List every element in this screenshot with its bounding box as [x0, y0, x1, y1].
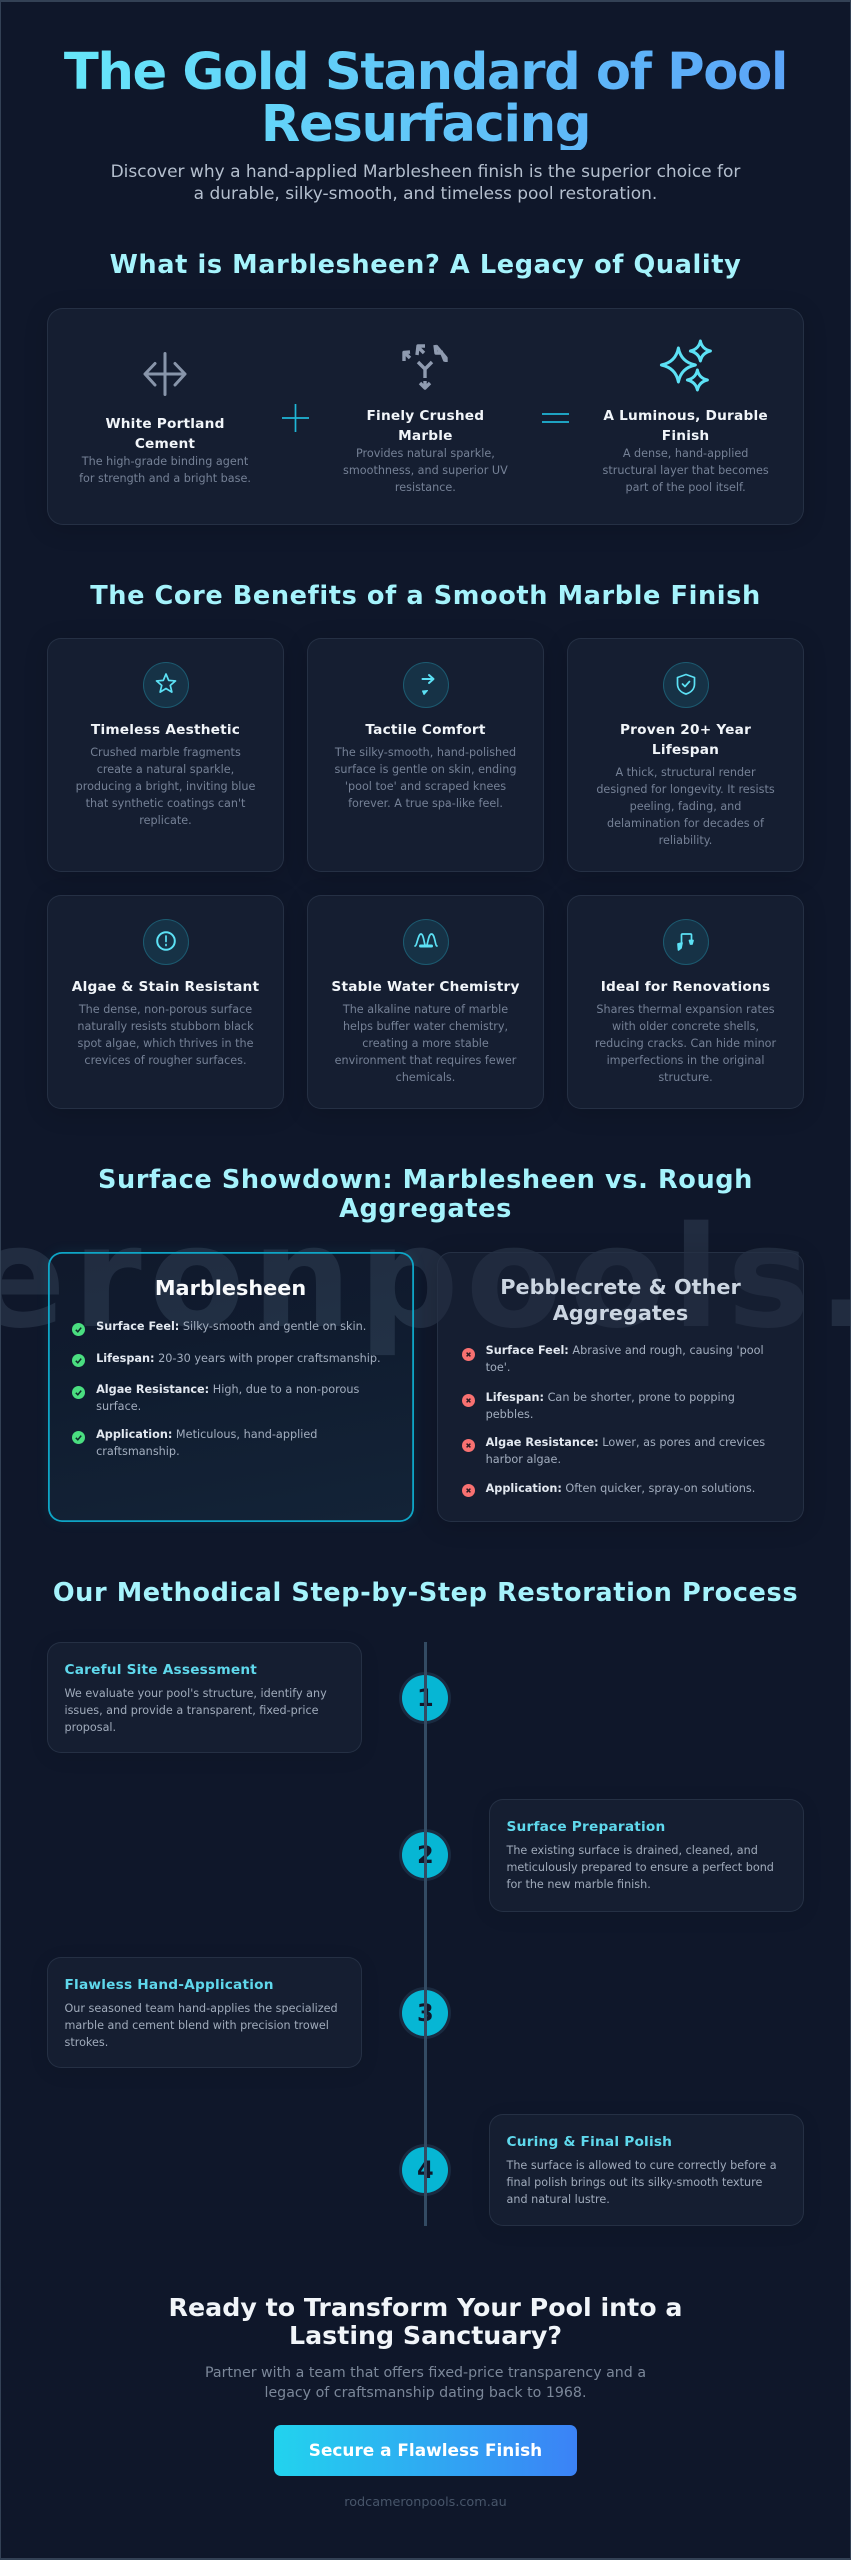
ingredient description: resistance.: [395, 480, 456, 494]
card title: Tactile Comfort: [365, 722, 486, 738]
panel: marblesheen formula: [47, 308, 804, 525]
panel: pebblecrete comparison: [437, 1252, 804, 1522]
website: rodcameronpools.com.au: [344, 2495, 507, 2510]
step number 2: [402, 1832, 448, 1878]
card text: with older concrete shells,: [612, 1020, 759, 1032]
step text: [506, 2157, 777, 2208]
card text: The silky-smooth, hand-polished: [335, 746, 516, 758]
card text: Shares thermal expansion rates: [596, 1002, 775, 1016]
card title: Timeless Aesthetic: [91, 722, 240, 738]
card text: The dense, non-porous surface: [79, 1002, 252, 1016]
step number 1: 1: [417, 1684, 434, 1712]
step title: Careful Site Assessment: [64, 1662, 257, 1678]
card text: that synthetic coatings can't: [86, 796, 245, 810]
icon: star: [142, 662, 188, 708]
card text: The alkaline nature of marble: [343, 1002, 508, 1016]
subtitle: a durable, silky-smooth, and timeless pool restoration.: [194, 184, 657, 204]
card text: create a natural sparkle,: [97, 762, 234, 776]
check item: application: [96, 1428, 317, 1458]
card text: A thick, structural render: [615, 766, 756, 778]
panel: timeless aesthetic: [47, 638, 284, 872]
cross item: lifespan: pebbles.: [486, 1408, 533, 1420]
icon: shield: [662, 662, 708, 708]
card text: chemicals.: [396, 1070, 455, 1084]
card title: Stable Water Chemistry: [331, 979, 520, 995]
heading: restoration process: Our Methodical Step-by-Step Restoration Process: [53, 1578, 798, 1608]
step text: We evaluate your pool's structure, identify any: [64, 1687, 327, 1700]
step title: Curing & Final Polish: [506, 2134, 672, 2150]
cross item: lifespan: Lifespan: Can be shorter, prone to popping: [486, 1390, 735, 1404]
step text: [64, 1685, 327, 1736]
step number 2: 2: [417, 1841, 434, 1869]
heading: surface showdown: Surface Showdown: Marblesheen vs. Rough: [98, 1165, 753, 1195]
call to action: [100, 2290, 751, 2520]
card title: Ideal for Renovations: [601, 979, 770, 995]
card text: naturally resists stubborn black: [77, 1020, 254, 1032]
result description: A dense, hand-applied: [623, 446, 748, 460]
ingredient title: Cement: [135, 436, 195, 452]
comparison title: [500, 1275, 741, 1325]
step text: [506, 1842, 774, 1893]
cta text: [205, 2363, 646, 2403]
cross item: algae resistance: Algae Resistance: Lower, as pores and crevices: [486, 1436, 765, 1448]
ingredient: white portland cement: [79, 352, 251, 485]
icon: sparkles: [660, 340, 712, 392]
icon: crushed fragments: [402, 344, 448, 390]
equals sign: [542, 413, 569, 423]
cta button: [274, 2425, 577, 2476]
cta text: Partner with a team that offers fixed-price transparency and a: [205, 2365, 646, 2381]
step text: Our seasoned team hand-applies the specialized: [64, 2002, 338, 2015]
card text: imperfections in the original: [607, 1054, 764, 1066]
subtitle: Discover why a hand-applied Marblesheen finish is the superior choice for: [111, 162, 740, 182]
card text: [596, 766, 775, 846]
icon: cement arrows: [144, 352, 186, 396]
card text: [335, 1002, 516, 1084]
ingredient title: Finely Crushed: [367, 408, 484, 424]
cross item: surface feel: toe'.: [486, 1360, 510, 1374]
check item: lifespan: Lifespan: 20-30 years with proper craftsmanship.: [96, 1352, 381, 1364]
step number 3: 3: [417, 1999, 434, 2027]
cross item: surface feel: [486, 1344, 764, 1374]
result title: [603, 408, 768, 444]
step text: proposal.: [64, 1721, 116, 1734]
cta heading: [169, 2294, 682, 2351]
result description: part of the pool itself.: [625, 480, 746, 494]
check item: application: Application: Meticulous, hand-applied: [96, 1428, 317, 1440]
step text: meticulously prepared to ensure a perfect bond: [506, 1861, 774, 1874]
icon: cross: [462, 1348, 475, 1361]
step number 4: 4: [417, 2156, 434, 2184]
card text: designed for longevity. It resists: [596, 782, 775, 796]
icon: check: [72, 1386, 85, 1399]
step text: final polish brings out its silky-smooth texture: [506, 2176, 762, 2189]
cta heading: Lasting Sanctuary?: [289, 2321, 562, 2350]
card text: [77, 1002, 254, 1066]
icon: cross: [462, 1484, 475, 1497]
card text: surface is gentle on skin, ending: [335, 762, 516, 776]
cross item: application: Application: Often quicker, spray-on solutions.: [486, 1482, 755, 1494]
check item: application: craftsmanship.: [96, 1444, 180, 1458]
check item: algae resistance: [96, 1382, 359, 1412]
plus sign: [282, 404, 309, 432]
ingredient description: smoothness, and superior UV: [343, 464, 508, 476]
card text: delamination for decades of: [607, 816, 764, 830]
step title: Flawless Hand-Application: [64, 1977, 274, 1993]
result description: structural layer that becomes: [603, 464, 769, 476]
card title: Proven 20+ Year: [620, 722, 751, 738]
ingredient description: [343, 446, 508, 494]
card text: producing a bright, inviting blue: [76, 780, 255, 792]
step text: for the new marble finish.: [506, 1878, 651, 1891]
ingredient: finely crushed marble: [343, 344, 508, 494]
card text: environment that requires fewer: [335, 1054, 516, 1066]
card text: Crushed marble fragments: [90, 746, 241, 758]
heading: core benefits: The Core Benefits of a Smooth Marble Finish: [90, 581, 761, 611]
card text: reliability.: [659, 834, 712, 846]
ingredient description: The high-grade binding agent: [82, 455, 248, 468]
result title: Finish: [662, 428, 709, 444]
panel: marblesheen comparison: [48, 1252, 414, 1522]
cta button: Secure a Flawless Finish: [309, 2440, 542, 2460]
icon: cross: [462, 1394, 475, 1407]
result title: A Luminous, Durable: [603, 408, 768, 424]
step 1 card: [47, 1642, 362, 1753]
ingredient description: for strength and a bright base.: [79, 472, 251, 485]
timeline: restoration steps: [47, 1642, 804, 2226]
comparison title: Marblesheen: [155, 1276, 306, 1300]
panel: algae resistant: [47, 895, 284, 1109]
timeline line: [424, 1642, 427, 2226]
result: luminous durable finish: [603, 340, 769, 494]
ingredient title: Marble: [398, 428, 453, 444]
cross item: algae resistance: [486, 1436, 765, 1466]
panel: tactile comfort: [307, 638, 544, 872]
card text: peeling, fading, and: [630, 800, 741, 812]
step 4 card: [489, 2114, 804, 2226]
ingredient title: [105, 416, 225, 452]
ingredient title: White Portland: [105, 416, 225, 432]
step title: Surface Preparation: [506, 1819, 665, 1835]
comparison title: Aggregates: [553, 1301, 688, 1325]
card text: reducing cracks. Can hide minor: [595, 1036, 776, 1050]
title: Resurfacing: [261, 94, 590, 154]
heading: surface showdown: Aggregates: [339, 1194, 512, 1224]
check item: surface feel: Surface Feel: Silky-smooth and gentle on skin.: [96, 1320, 366, 1332]
card text: crevices of rougher surfaces.: [84, 1054, 247, 1066]
card text: spot algae, which thrives in the: [78, 1036, 253, 1050]
icon: arrow: [402, 662, 448, 708]
icon: cross: [462, 1439, 475, 1452]
panel: proven lifespan: [567, 638, 804, 872]
title: [47, 46, 804, 150]
icon: water arches: [402, 919, 448, 965]
check item: algae resistance: Algae Resistance: High, due to a non-porous: [96, 1382, 359, 1396]
ingredient description: Provides natural sparkle,: [356, 446, 495, 460]
card title: Lifespan: [652, 742, 719, 758]
icon: check: [72, 1431, 85, 1444]
icon: check: [72, 1354, 85, 1367]
cross item: lifespan: [486, 1390, 735, 1420]
card text: [334, 746, 516, 810]
step 3 card: [47, 1957, 362, 2068]
step text: The existing surface is drained, cleaned, and: [506, 1844, 758, 1857]
step text: [64, 2000, 338, 2051]
ingredient title: [367, 408, 484, 444]
cta heading: Ready to Transform Your Pool into a: [169, 2293, 682, 2322]
step text: marble and cement blend with precision trowel: [64, 2019, 329, 2032]
panel: renovations: [567, 895, 804, 1109]
cta text: legacy of craftsmanship dating back to 1968.: [265, 2385, 586, 2401]
card text: structure.: [658, 1070, 713, 1084]
title: The Gold Standard of Pool: [64, 42, 787, 102]
cross item: surface feel: Surface Feel: Abrasive and rough, causing 'pool: [486, 1344, 764, 1356]
heading: surface showdown: [98, 1165, 753, 1224]
step number 1: [402, 1675, 448, 1721]
ingredient description: [79, 455, 251, 485]
step number 3: [402, 1990, 448, 2036]
card text: [76, 746, 255, 826]
icon: alert circle: [142, 919, 188, 965]
card title: Algae & Stain Resistant: [72, 979, 259, 995]
subtitle: [111, 162, 740, 204]
step text: strokes.: [64, 2036, 108, 2049]
card text: helps buffer water chemistry,: [343, 1020, 508, 1032]
step number 4: [402, 2147, 448, 2193]
icon: check: [72, 1323, 85, 1336]
step text: The surface is allowed to cure correctly before a: [506, 2159, 777, 2172]
step text: issues, and provide a transparent, fixed-price: [64, 1704, 318, 1717]
card title: [620, 722, 751, 758]
comparison title: Pebblecrete & Other: [500, 1275, 741, 1299]
panel: water chemistry: [307, 895, 544, 1109]
step text: and natural lustre.: [506, 2193, 610, 2206]
check item: algae resistance: surface.: [96, 1400, 141, 1412]
card text: replicate.: [139, 814, 192, 826]
card text: [595, 1002, 776, 1084]
result description: [603, 446, 769, 494]
card text: creating a more stable: [362, 1036, 489, 1050]
heading: what is marblesheen: What is Marblesheen? A Legacy of Quality: [110, 250, 741, 280]
step 2 card: [489, 1799, 804, 1912]
card text: forever. A true spa-like feel.: [348, 796, 503, 810]
card text: 'pool toe' and scraped knees: [345, 780, 506, 792]
icon: renovation arch: [662, 919, 708, 965]
cross item: algae resistance: harbor algae.: [486, 1452, 561, 1466]
